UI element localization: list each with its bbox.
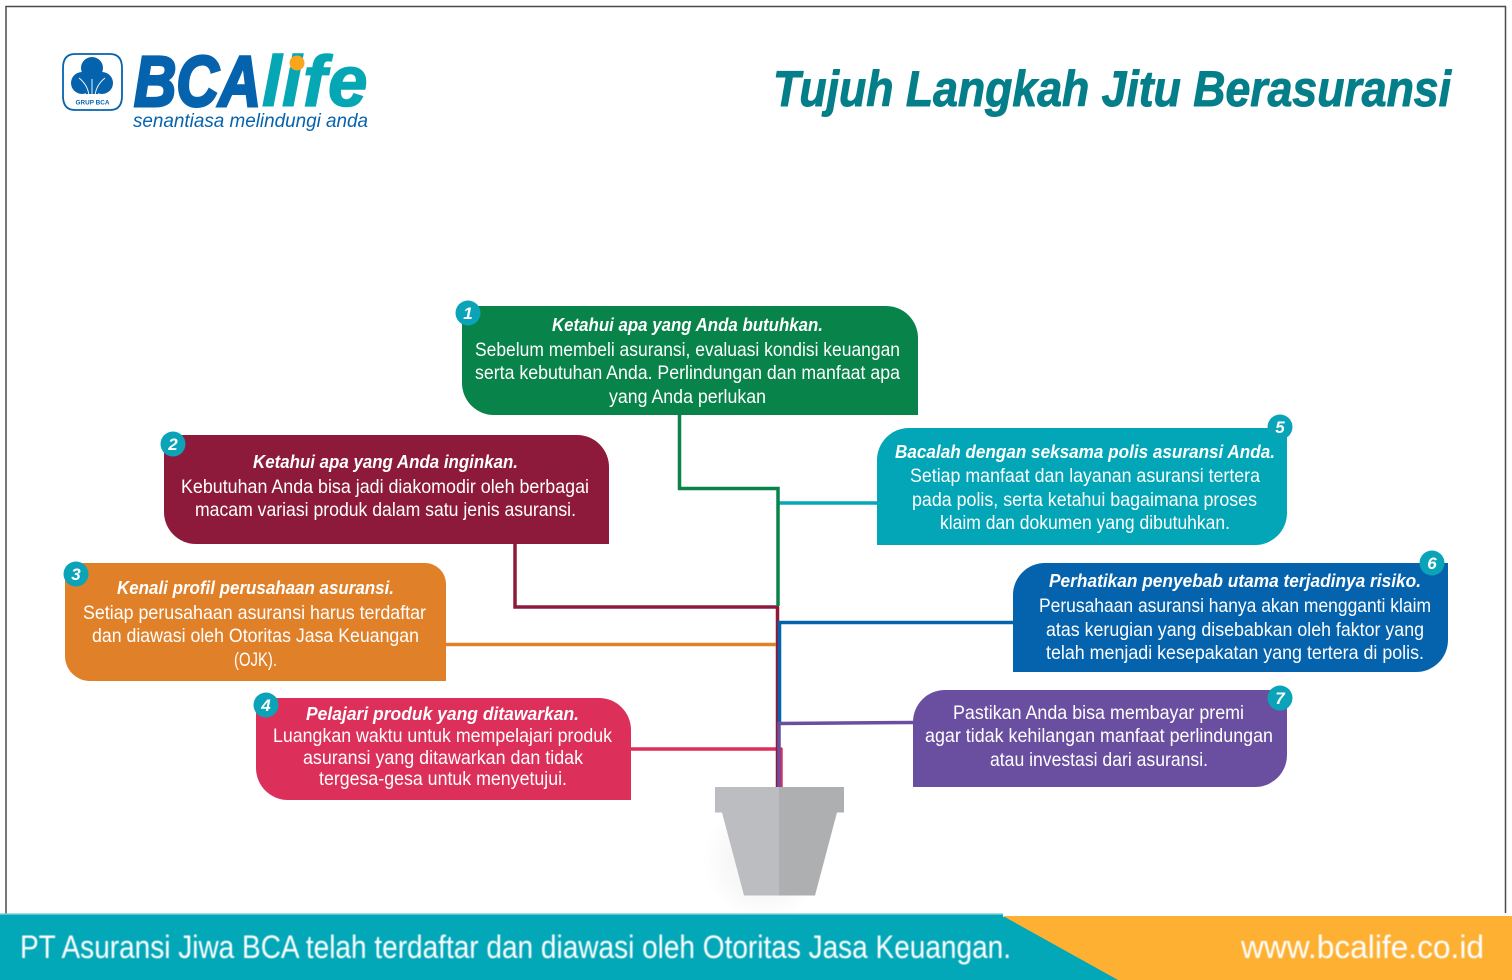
body 3: dan diawasi oleh Otoritas Jasa Keuangan (92, 625, 419, 647)
badge 1: 1 (463, 304, 473, 323)
heading 1: Ketahui apa yang Anda butuhkan. (552, 315, 823, 335)
body 1 (475, 339, 900, 408)
body 2 (181, 476, 589, 521)
icon: BCA emblem (63, 54, 122, 110)
body 1: yang Anda perlukan (609, 386, 766, 408)
badge 3: 3 (71, 565, 81, 584)
body 7: atau investasi dari asuransi. (990, 749, 1208, 771)
icon: BCA emblem: GRUP BCA (76, 100, 110, 106)
logo tagline: senantiasa melindungi anda (133, 111, 368, 132)
connector: step 2 (515, 544, 779, 787)
badge 3 (64, 562, 88, 586)
body 2: macam variasi produk dalam satu jenis asuransi. (195, 499, 576, 521)
body 4: tergesa-gesa untuk menyetujui. (319, 768, 567, 790)
title: Tujuh Langkah Jitu Berasuransi (773, 61, 1452, 117)
connector: step 7 (779, 722, 913, 787)
body 5 (910, 465, 1260, 534)
panel: step 1 (456, 300, 918, 415)
body 3: (OJK). (234, 649, 277, 671)
badge 2 (160, 432, 186, 456)
badge 6 (1420, 550, 1444, 576)
logo: BCA life (63, 43, 368, 132)
panel: step 3 (64, 562, 446, 681)
connector: step 5 (779, 501, 877, 505)
panel: step 5 (877, 414, 1292, 545)
body 5: Setiap manfaat dan layanan asuransi tertera (910, 465, 1260, 487)
body 3: Setiap perusahaan asuransi harus terdaftar (83, 602, 426, 624)
body 6: atas kerugian yang disebabkan oleh faktor yang (1046, 619, 1424, 641)
badge 5: 5 (1275, 418, 1285, 437)
icon: flower pot (715, 787, 844, 908)
body 1: serta kebutuhan Anda. Perlindungan dan manfaat apa (475, 362, 900, 384)
icon: orange dot (290, 56, 304, 70)
body 4 (273, 725, 612, 790)
body 4: asuransi yang ditawarkan dan tidak (303, 747, 583, 769)
connector lines (446, 415, 1013, 787)
body 5: klaim dan dokumen yang dibutuhkan. (940, 512, 1230, 534)
badge 5 (1268, 414, 1292, 440)
heading 5: Bacalah dengan seksama polis asuransi Anda. (895, 442, 1275, 462)
connector: step 6 (780, 622, 1013, 725)
connector: step 3 (446, 643, 776, 646)
body 7 (925, 702, 1273, 771)
connector: step 4 (631, 747, 782, 751)
badge 2: 2 (167, 435, 178, 454)
body 5: pada polis, serta ketahui bagaimana proses (912, 489, 1257, 511)
body 2: Kebutuhan Anda bisa jadi diakomodir oleh berbagai (181, 476, 589, 498)
body 6 (1039, 595, 1431, 664)
body 7: Pastikan Anda bisa membayar premi (953, 702, 1244, 724)
body 6: telah menjadi kesepakatan yang tertera di polis. (1046, 642, 1424, 664)
badge 6: 6 (1427, 554, 1437, 573)
heading 6: Perhatikan penyebab utama terjadinya risiko. (1049, 571, 1421, 591)
footer disclaimer: PT Asuransi Jiwa BCA telah terdaftar dan diawasi oleh Otoritas Jasa Keuangan. (20, 929, 1011, 965)
body 7: agar tidak kehilangan manfaat perlindungan (925, 725, 1273, 747)
panel: step 4 (254, 692, 631, 800)
panel: step 6 (1013, 550, 1448, 672)
badge 7: 7 (1275, 689, 1286, 708)
connector: step 1 (680, 415, 778, 606)
footer band (0, 913, 1512, 980)
logo wordmark life: life (262, 43, 368, 122)
badge 4: 4 (260, 696, 271, 715)
badge 1 (456, 300, 480, 326)
badge 4 (254, 692, 278, 718)
heading 4: Pelajari produk yang ditawarkan. (306, 704, 579, 724)
body 4: Luangkan waktu untuk mempelajari produk (273, 725, 612, 747)
body 3 (83, 602, 426, 671)
body 1: Sebelum membeli asuransi, evaluasi kondisi keuangan (475, 339, 900, 361)
logo wordmark BCA: BCA (134, 43, 261, 122)
footer url: www.bcalife.co.id (1240, 929, 1484, 965)
heading 3: Kenali profil perusahaan asuransi. (117, 578, 394, 598)
panel: step 7 (913, 686, 1292, 787)
body 6: Perusahaan asuransi hanya akan mengganti klaim (1039, 595, 1431, 617)
badge 7 (1268, 686, 1292, 710)
footer orange section (1003, 916, 1512, 980)
heading 2: Ketahui apa yang Anda inginkan. (253, 452, 518, 472)
panel: step 2 (160, 432, 609, 544)
connector: step 4 stem (779, 748, 783, 787)
